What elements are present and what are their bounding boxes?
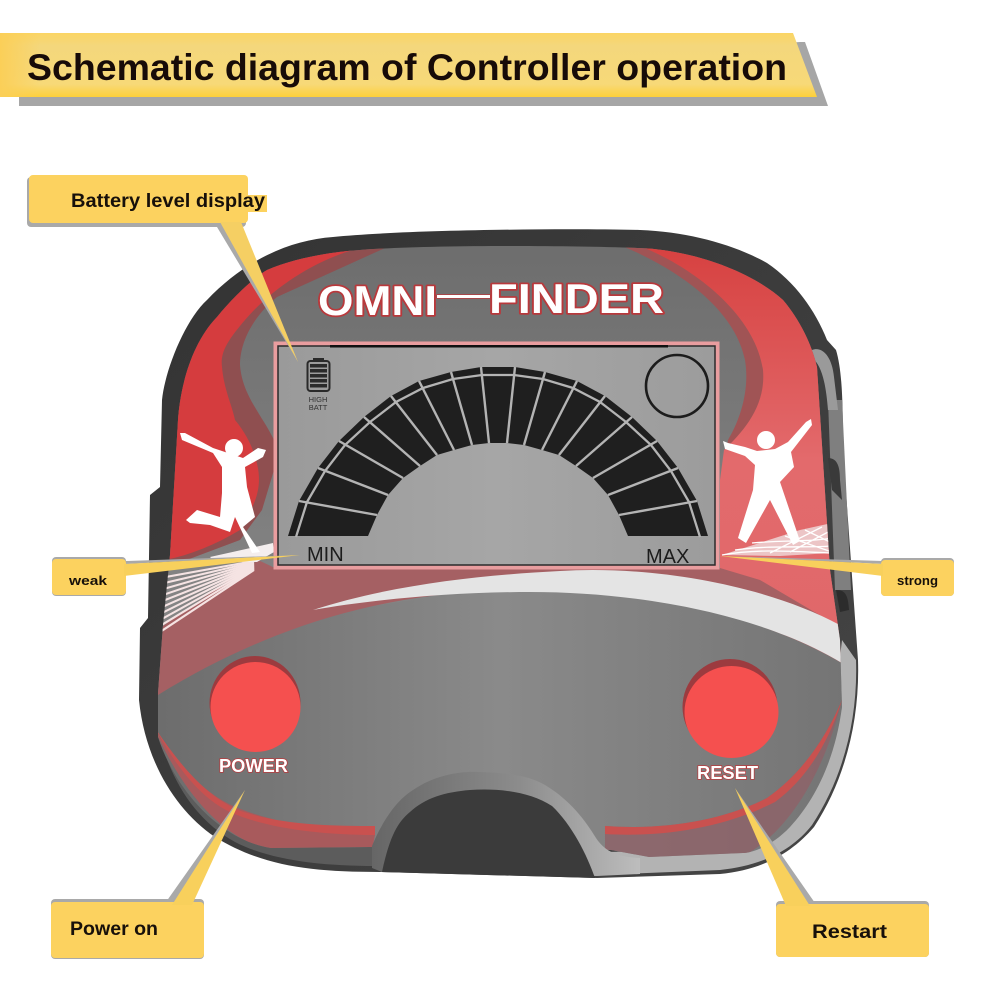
callout: weak: weak [68, 573, 108, 588]
callout: restart [735, 788, 929, 957]
white swoosh [313, 570, 845, 665]
callout: strong: strong [897, 573, 938, 588]
callout: weak [52, 555, 300, 596]
logo [318, 275, 664, 324]
logo: FINDER [489, 275, 664, 322]
lower face [158, 613, 842, 857]
left red sweep [170, 248, 384, 560]
left jumping figure [180, 433, 266, 553]
callout: power on: Power on [70, 919, 158, 940]
logo: OMNI [318, 277, 437, 324]
white ground left [210, 543, 274, 562]
power button [210, 656, 300, 752]
callout: strong [720, 556, 954, 596]
face panels clipped to the inner outline [140, 240, 850, 860]
silver arch [372, 772, 640, 876]
controller device [139, 229, 858, 878]
battery icon: BATT [309, 403, 328, 412]
MIN label: MIN [307, 544, 344, 566]
callout: battery level display: Battery level display [71, 191, 265, 212]
black arch [382, 790, 595, 878]
bottom right red stripe [605, 700, 842, 860]
title text: Schematic diagram of Controller operation [27, 47, 787, 88]
battery icon: HIGH [309, 395, 327, 404]
reset button [682, 659, 778, 758]
LCD screen [274, 342, 718, 568]
MAX label: MAX [646, 546, 689, 568]
upper face [140, 240, 850, 710]
lower silver rim [600, 640, 856, 875]
callout: battery level display [27, 175, 298, 362]
circular indicator [646, 355, 708, 417]
right red sweep [622, 240, 850, 640]
hatch lines left [160, 561, 254, 632]
title banner [0, 33, 828, 106]
hatch mesh right [722, 523, 832, 556]
power label: POWER [219, 756, 288, 776]
signal gauge [288, 367, 708, 537]
reset label: RESET [697, 763, 758, 783]
battery icon [308, 358, 330, 412]
callout: power on [51, 790, 245, 959]
bottom left red stripe [155, 730, 375, 850]
right jumping figure [723, 419, 812, 545]
body rim [139, 229, 858, 878]
maroon lower band [150, 560, 845, 700]
callout: restart: Restart [812, 922, 888, 943]
right side grip [812, 349, 851, 612]
